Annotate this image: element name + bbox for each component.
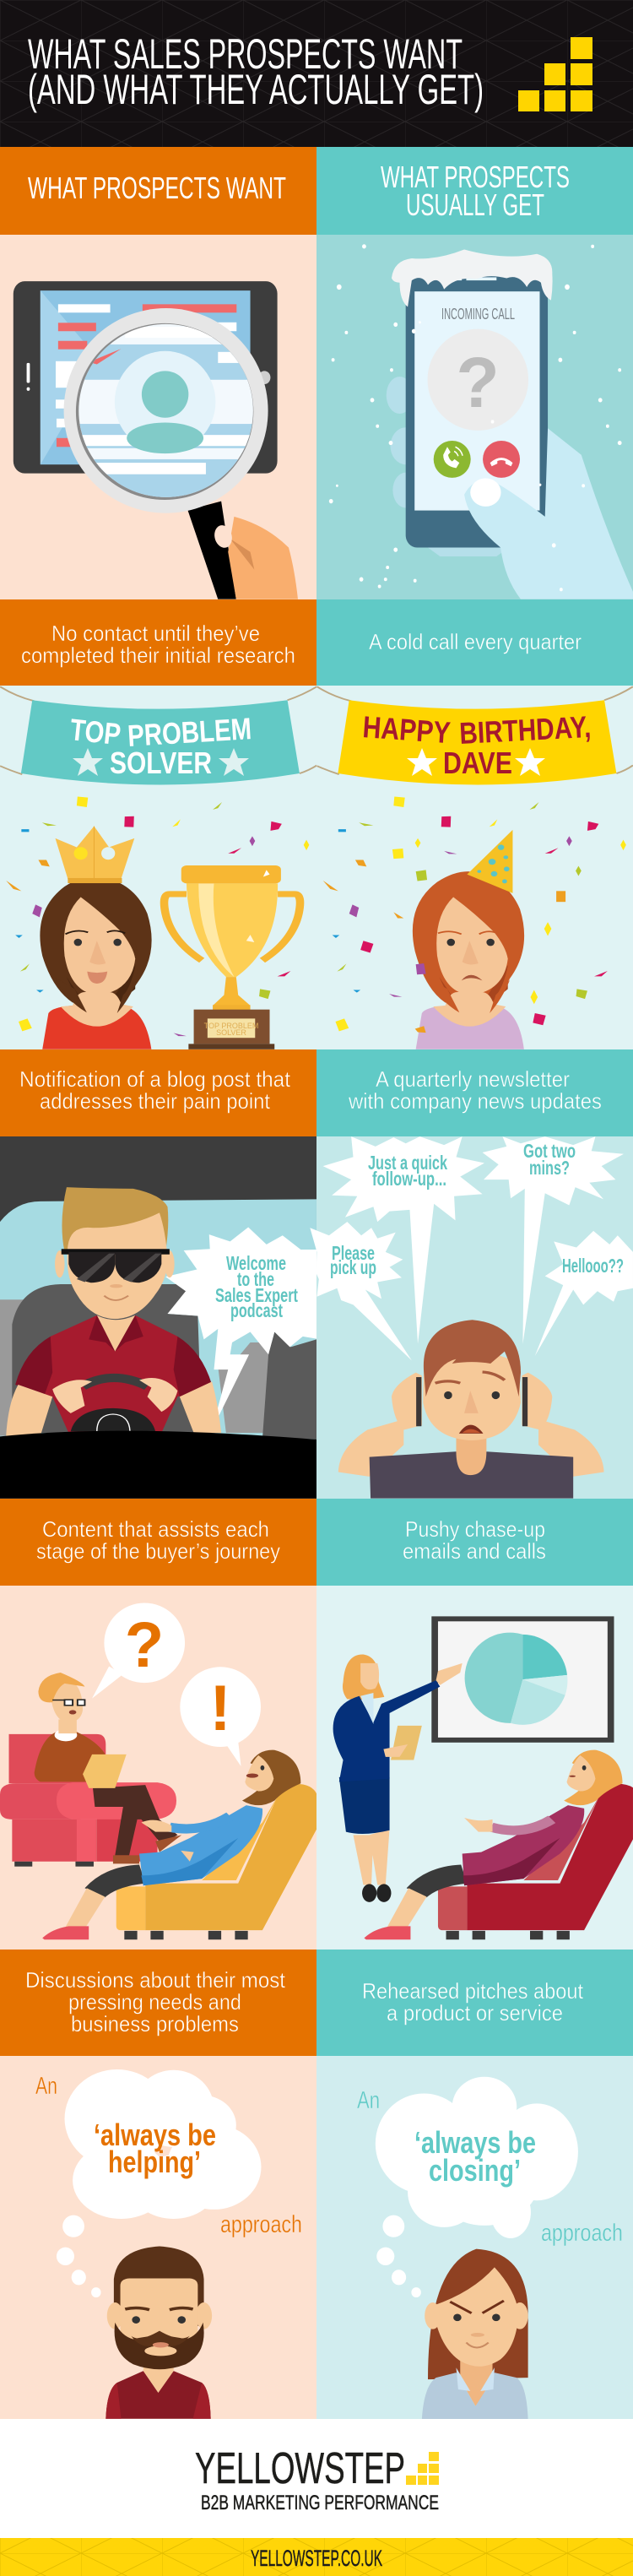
text: always be closing — [414, 2125, 536, 2188]
banner text — [361, 709, 592, 780]
panel: frozen phone call — [316, 235, 633, 599]
banner — [21, 700, 300, 784]
icon: magnifying glass handle — [187, 502, 236, 599]
text: always be helping: helping’ — [108, 2145, 201, 2179]
shouted phrases: follow-up... — [372, 1168, 446, 1190]
car window — [0, 1199, 316, 1439]
icon: hand fingers behind phone — [387, 377, 509, 556]
shouted phrases: mins? — [529, 1157, 570, 1179]
caption: quarterly newsletter: A quarterly newsletter — [376, 1066, 570, 1092]
shouted phrases: pick up — [330, 1256, 376, 1278]
caption: pushy chase-up — [316, 1499, 633, 1586]
text: always be helping: ‘always be — [94, 2118, 216, 2152]
dashboard — [0, 1431, 316, 1499]
scheming woman — [422, 2249, 528, 2420]
caption: no contact — [0, 599, 316, 686]
patient — [42, 1750, 300, 1939]
icon: magnifier lens — [64, 308, 268, 513]
footer url bar — [0, 2538, 633, 2576]
confetti — [323, 797, 626, 1036]
caption: discussions about needs: pressing needs and — [68, 1989, 241, 2015]
column heading: what prospects want — [0, 147, 316, 235]
yellow armchair — [116, 1784, 316, 1939]
bunting strings — [0, 686, 316, 774]
column heading: what prospects want: WHAT PROSPECTS WANT — [28, 171, 286, 205]
banner text: DAVE — [443, 746, 512, 780]
header — [0, 0, 633, 147]
banner text: TOP — [68, 712, 122, 751]
thought cloud — [376, 2077, 578, 2297]
caption: cold call — [316, 599, 633, 686]
icon: party hat — [467, 830, 512, 893]
banner text: HAPPY — [361, 709, 452, 750]
sunglasses — [62, 1249, 170, 1283]
panel: top problem solver — [0, 686, 316, 1049]
caption: no contact: No contact until they’ve — [51, 621, 260, 646]
wordmark: YELLOWSTEP — [195, 2444, 405, 2493]
caption: discussions about needs: Discussions about their most — [25, 1967, 286, 1993]
red armchair — [0, 1734, 176, 1867]
shouting bubbles — [310, 1136, 633, 1360]
text: always be closing: ‘always be — [414, 2125, 536, 2160]
stars — [407, 748, 545, 776]
panel: always be helping — [0, 2056, 316, 2419]
icon: crown — [56, 827, 134, 883]
panel: man overwhelmed by calls — [310, 1136, 633, 1499]
shouted phrases: Please — [332, 1242, 375, 1264]
caption: blog post notification: Notification of a blog post that — [19, 1066, 291, 1092]
caption: blog post notification: addresses their pain point — [40, 1088, 271, 1114]
icon: small yellow steps — [406, 2452, 439, 2485]
steering wheel — [52, 1378, 177, 1431]
footer logo block — [0, 2419, 633, 2538]
panel: happy birthday dave — [316, 686, 633, 1049]
thought cloud — [57, 2069, 261, 2297]
panel: therapy style discussion — [0, 1586, 316, 1950]
icon: tablet — [14, 281, 278, 474]
caption: quarterly newsletter: with company news updates — [348, 1088, 602, 1114]
panel: rehearsed pitch — [316, 1586, 633, 1950]
caption: pushy chase-up: Pushy chase-up — [405, 1516, 545, 1542]
speech bubble text: to the — [237, 1268, 274, 1290]
icon text: incoming call: INCOMING CALL — [441, 306, 515, 323]
banner text: PROBLEM — [127, 711, 252, 753]
banner text: BIRTHDAY, — [458, 709, 592, 751]
column heading: what prospects usually get: USUALLY GET — [406, 187, 544, 222]
speech bubble — [165, 1228, 316, 1430]
presentation screen with pie chart — [435, 1619, 611, 1740]
woman with crown — [40, 876, 152, 1049]
panel: tablet under magnifying glass — [0, 235, 316, 599]
icon: yellow steps logo — [518, 37, 592, 111]
column heading: what prospects usually get — [316, 147, 633, 235]
text: always be helping — [94, 2118, 216, 2179]
icon: profile person — [127, 371, 203, 453]
man covering ears — [338, 1320, 604, 1499]
caption: cold call: A cold call every quarter — [369, 629, 582, 654]
footer url bar: YELLOWSTEP.CO.UK — [251, 2546, 382, 2571]
caption: buyer's journey content: stage of the buyer’s journey — [36, 1538, 280, 1564]
bunting strings — [316, 686, 633, 774]
caption: pushy chase-up: emails and calls — [403, 1538, 546, 1564]
speech bubbles — [92, 1603, 261, 1766]
trophy plaque text: TOP PROBLEM — [204, 1022, 258, 1030]
speech bubble text: Sales Expert — [215, 1284, 298, 1306]
snowflakes — [329, 244, 622, 591]
confetti — [6, 797, 309, 1036]
caption: buyer's journey content: Content that assists each — [42, 1516, 269, 1542]
confetti over woman — [415, 963, 426, 1033]
text: approach: approach — [220, 2211, 302, 2238]
panel: man driving listening to podcast — [0, 1136, 316, 1499]
speech bubble text: podcast — [230, 1299, 283, 1321]
shouted phrases — [330, 1140, 624, 1278]
trophy plaque text — [204, 1022, 258, 1037]
caption: blog post notification — [0, 1049, 316, 1136]
title — [28, 30, 484, 113]
unhappy woman — [413, 871, 524, 1049]
caption: rehearsed pitches — [316, 1950, 633, 2056]
tagline: B2B MARKETING PERFORMANCE — [201, 2492, 439, 2514]
icon: hand holding magnifier — [212, 517, 298, 599]
bored prospect — [364, 1750, 623, 1939]
icon: snow on top of phone — [392, 249, 553, 306]
speech bubble text: Welcome — [226, 1252, 286, 1274]
trophy plaque text: SOLVER — [216, 1028, 246, 1037]
caption: no contact: completed their initial research — [21, 643, 295, 668]
speech bubble text — [215, 1252, 298, 1321]
caption: quarterly newsletter — [316, 1049, 633, 1136]
icon: phone — [406, 274, 548, 548]
banner text: SOLVER — [110, 746, 212, 780]
stars — [73, 748, 249, 776]
caption: rehearsed pitches: a product or service — [387, 2000, 563, 2026]
text: always be closing: closing’ — [429, 2153, 521, 2188]
icon: exclamation mark: ! — [209, 1673, 231, 1744]
text: an: An — [35, 2073, 57, 2100]
text: an: An — [357, 2087, 380, 2114]
shouted phrases: Just a quick — [368, 1152, 447, 1174]
caption: rehearsed pitches: Rehearsed pitches about — [362, 1978, 584, 2004]
icon: trophy — [165, 865, 300, 1049]
icon: question mark on caller photo: ? — [456, 343, 500, 422]
banner — [338, 700, 616, 784]
caption: buyer's journey content — [0, 1499, 316, 1586]
therapist — [35, 1673, 181, 1863]
red armchair — [438, 1784, 633, 1939]
driver — [6, 1187, 221, 1436]
icon: question mark: ? — [125, 1609, 164, 1681]
icon: icy hand with thumb — [464, 428, 633, 599]
car interior — [0, 1284, 316, 1439]
presenter — [333, 1654, 463, 1902]
banner text — [68, 711, 252, 780]
caption: discussions about needs — [0, 1950, 316, 2056]
shouted phrases: Got two — [523, 1140, 576, 1162]
panel: always be closing — [316, 2056, 633, 2420]
bearded man — [106, 2246, 212, 2419]
caption: discussions about needs: business problems — [71, 2011, 239, 2036]
